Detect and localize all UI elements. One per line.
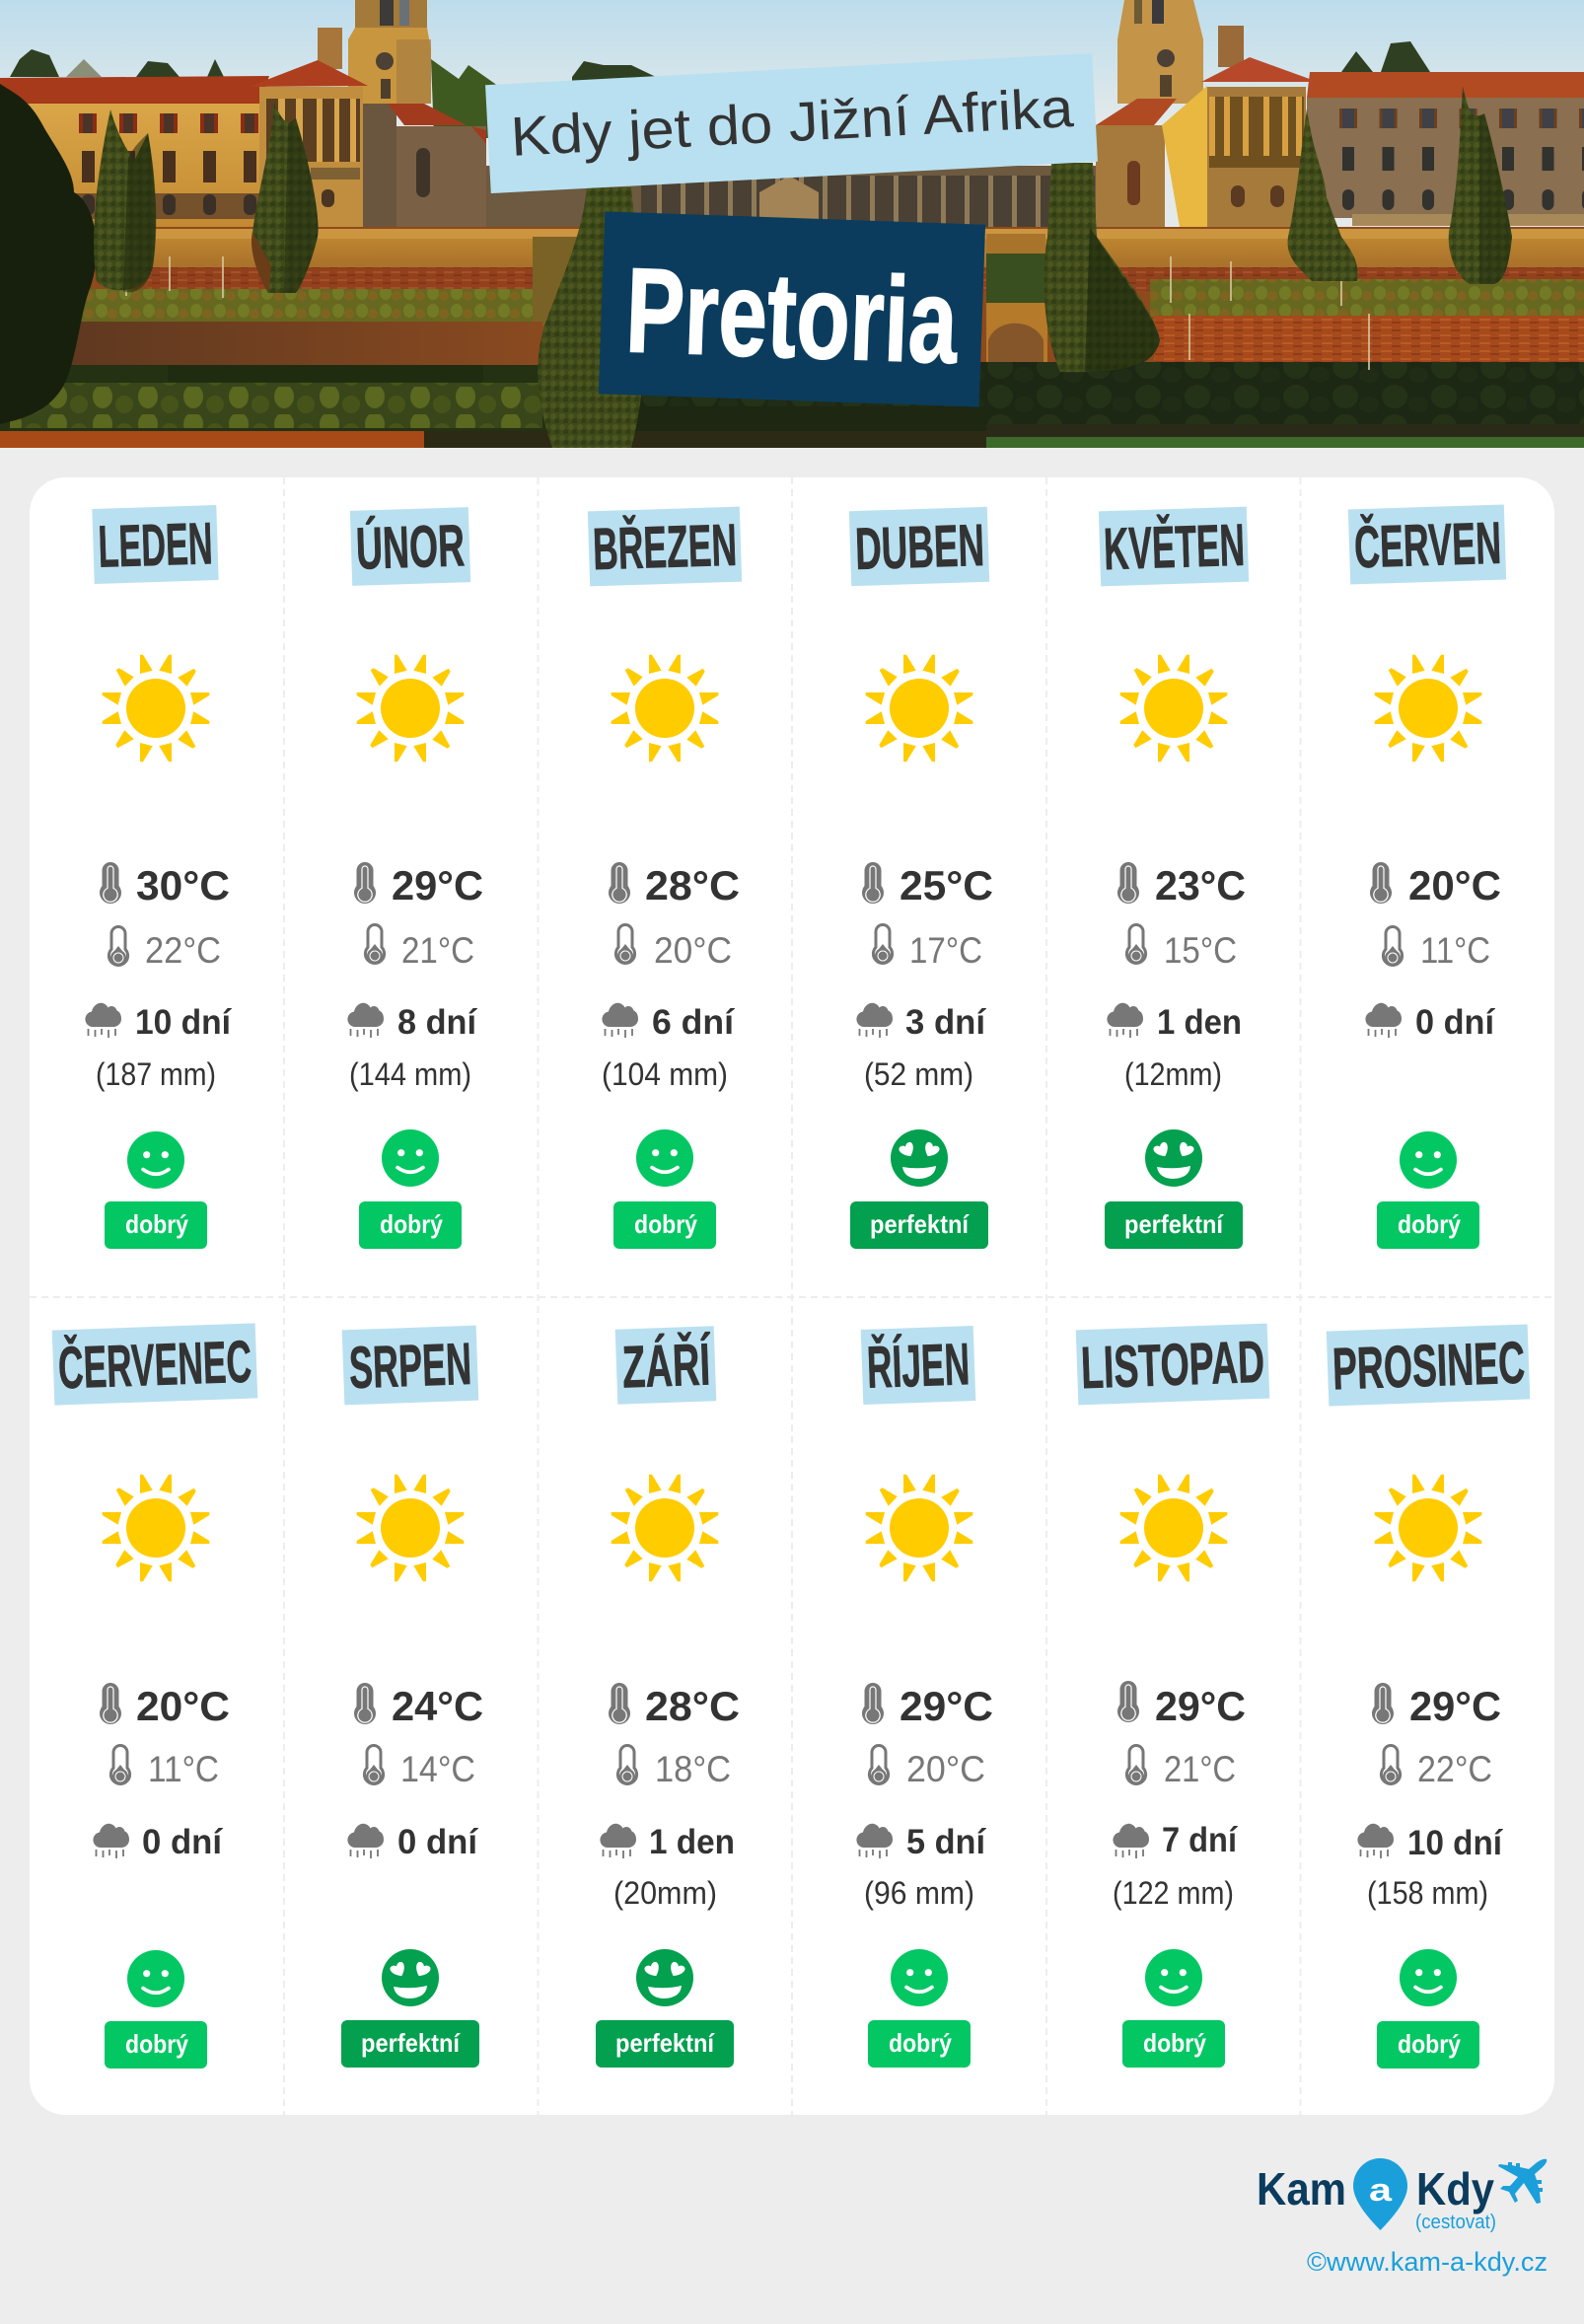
high temperature: 28°C — [645, 862, 740, 908]
rain days — [347, 1823, 478, 1861]
low temperature: 22°C — [1417, 1749, 1492, 1789]
month label — [849, 507, 989, 586]
rain days — [1113, 1821, 1238, 1859]
rainfall: (122 mm) — [1113, 1875, 1234, 1911]
month label: ŘÍJEN — [866, 1331, 971, 1401]
title banner — [485, 53, 1098, 193]
month label: LEDEN — [97, 510, 214, 580]
rainfall: (96 mm) — [864, 1875, 974, 1911]
high temperature — [1117, 862, 1246, 908]
low temperature: 22°C — [145, 930, 221, 971]
icon: sun — [1120, 1475, 1227, 1581]
rating: dobrý — [1143, 2028, 1206, 2058]
rain days: 0 dní — [1415, 1003, 1495, 1042]
panel: srpen — [341, 1326, 483, 2068]
panel: březen — [588, 507, 742, 1249]
rating — [596, 1949, 734, 2068]
low temperature: 14°C — [400, 1749, 475, 1789]
icon: sun — [103, 655, 209, 762]
month label — [350, 507, 470, 586]
panel: duben — [849, 507, 993, 1249]
rain days — [85, 1003, 232, 1042]
title banner: Kdy jet do Jižní Afrika — [509, 76, 1076, 168]
rating — [613, 1129, 716, 1249]
high temperature: 29°C — [1409, 1683, 1501, 1729]
month label — [1099, 507, 1249, 586]
rainfall: (12mm) — [1124, 1056, 1222, 1092]
icon: sun — [612, 1475, 718, 1581]
month label — [615, 1326, 716, 1405]
rating: dobrý — [1398, 1209, 1461, 1239]
panel: listopad — [1076, 1324, 1269, 2068]
city banner — [599, 211, 985, 407]
rating: dobrý — [1398, 2029, 1461, 2059]
month label: ÚNOR — [355, 512, 466, 582]
icon: sun — [103, 1475, 209, 1581]
rating — [105, 1131, 207, 1249]
rain days: 10 dní — [1407, 1824, 1503, 1862]
rain days: 0 dní — [142, 1823, 223, 1861]
rain days: 10 dní — [135, 1003, 232, 1042]
panel: červenec — [52, 1323, 257, 2069]
low temperature — [365, 925, 474, 971]
low temperature — [108, 927, 221, 971]
rain days: 8 dní — [397, 1003, 477, 1042]
high temperature: 24°C — [392, 1683, 483, 1729]
rating — [1377, 1949, 1479, 2069]
rating — [1105, 1129, 1243, 1249]
rain days — [856, 1003, 986, 1042]
logo: Kam a Kdy: Kdy — [1416, 2163, 1494, 2215]
panel: květen — [1099, 507, 1249, 1249]
panel: leden — [85, 505, 232, 1249]
panel: únor — [347, 507, 483, 1249]
rain days — [1107, 1003, 1242, 1042]
hero photo: Union Buildings in Pretoria — [0, 0, 1584, 448]
panel: červen — [1348, 505, 1506, 1249]
icon: sun — [1375, 1475, 1481, 1581]
rating: dobrý — [125, 1209, 188, 1239]
high temperature: 30°C — [136, 862, 230, 908]
high temperature: 29°C — [1155, 1683, 1246, 1729]
icon: sun — [1120, 655, 1227, 762]
rating: dobrý — [634, 1209, 697, 1239]
low temperature — [110, 1746, 219, 1789]
icon: sun — [357, 655, 464, 762]
rating: perfektní — [870, 1209, 970, 1239]
rainfall: (187 mm) — [96, 1056, 216, 1092]
month label: ČERVENEC — [57, 1329, 252, 1401]
month label: ZÁŘÍ — [621, 1331, 712, 1401]
rain days — [93, 1823, 223, 1861]
rating — [1377, 1131, 1479, 1249]
month label — [1348, 505, 1506, 584]
rating: dobrý — [889, 2028, 952, 2058]
low temperature: 15°C — [1164, 930, 1237, 971]
rating — [1122, 1949, 1225, 2068]
panel: říjen — [856, 1326, 993, 2068]
rainfall: (144 mm) — [349, 1056, 471, 1092]
month label — [342, 1326, 478, 1405]
rating — [850, 1129, 988, 1249]
rating — [105, 1950, 207, 2069]
rain days: 1 den — [1157, 1003, 1242, 1042]
rating — [359, 1129, 462, 1249]
month label: KVĚTEN — [1103, 512, 1246, 582]
rain days: 1 den — [649, 1823, 735, 1861]
rating: dobrý — [125, 2029, 188, 2059]
rain days: 6 dní — [652, 1003, 735, 1042]
rain days: 0 dní — [397, 1823, 478, 1861]
icon: map pin: a — [1369, 2172, 1392, 2208]
high temperature: 28°C — [645, 1683, 740, 1729]
rain days — [600, 1823, 735, 1861]
panel: září — [596, 1326, 740, 2068]
month label: LISTOPAD — [1080, 1329, 1265, 1401]
low temperature: 20°C — [906, 1749, 985, 1789]
low temperature — [615, 925, 732, 971]
month label: DUBEN — [854, 512, 985, 582]
rating: perfektní — [361, 2028, 461, 2058]
icon: sun — [357, 1475, 464, 1581]
icon: plane — [1498, 2159, 1547, 2204]
rainfall: (104 mm) — [602, 1056, 728, 1092]
low temperature: 20°C — [654, 930, 732, 971]
low temperature — [617, 1746, 731, 1789]
low temperature — [1126, 1746, 1236, 1789]
icon: sun — [1375, 655, 1481, 762]
low temperature: 11°C — [1420, 930, 1490, 971]
high temperature: 20°C — [136, 1683, 230, 1729]
high temperature: 20°C — [1408, 862, 1501, 908]
low temperature: 21°C — [1164, 1749, 1236, 1789]
panel: prosinec — [1327, 1324, 1530, 2069]
low temperature — [1126, 925, 1237, 971]
rain days: 7 dní — [1162, 1821, 1238, 1859]
month label — [92, 505, 219, 584]
rainfall: (52 mm) — [864, 1056, 973, 1092]
rainfall: (20mm) — [613, 1875, 717, 1911]
rating: perfektní — [615, 2028, 715, 2058]
high temperature: 23°C — [1155, 862, 1246, 908]
website credit: ©www.kam-a-kdy.cz — [1307, 2247, 1548, 2277]
rain days — [602, 1003, 735, 1042]
rain days — [347, 1003, 477, 1042]
month label — [1076, 1324, 1269, 1405]
high temperature: 25°C — [900, 862, 993, 908]
low temperature — [364, 1746, 475, 1789]
rain days — [1365, 1003, 1495, 1042]
low temperature — [869, 1746, 985, 1789]
rain days — [1357, 1824, 1503, 1862]
high temperature — [1117, 1681, 1246, 1729]
low temperature — [873, 925, 982, 971]
high temperature: 29°C — [392, 862, 483, 908]
icon: sun — [866, 655, 972, 762]
month label — [861, 1326, 975, 1405]
rainfall: (158 mm) — [1367, 1875, 1488, 1911]
icon: sun — [612, 655, 718, 762]
city banner: Pretoria — [623, 243, 961, 389]
low temperature: 17°C — [909, 930, 982, 971]
month label — [588, 507, 742, 586]
low temperature — [1381, 1746, 1492, 1789]
month label — [52, 1323, 257, 1406]
low temperature: 11°C — [148, 1749, 219, 1789]
rain days: 5 dní — [906, 1823, 986, 1861]
panel: calendar card — [30, 477, 1554, 2115]
rain days: 3 dní — [905, 1003, 986, 1042]
logo: Kam a Kdy — [1257, 2158, 1547, 2233]
logo: Kam a Kdy: (cestovat) — [1415, 2212, 1496, 2233]
rating: perfektní — [1124, 1209, 1224, 1239]
low temperature: 21°C — [401, 930, 474, 971]
icon: map pin — [1353, 2158, 1407, 2230]
low temperature — [1383, 927, 1490, 971]
icon: sun — [866, 1475, 972, 1581]
rating — [868, 1949, 971, 2068]
low temperature: 18°C — [655, 1749, 731, 1789]
rating — [341, 1949, 479, 2068]
high temperature: 29°C — [900, 1683, 993, 1729]
rating: dobrý — [380, 1209, 443, 1239]
rain days — [856, 1823, 986, 1861]
logo: Kam a Kdy: Kam — [1257, 2163, 1346, 2215]
month label: SRPEN — [348, 1331, 472, 1401]
month label: BŘEZEN — [592, 512, 738, 582]
